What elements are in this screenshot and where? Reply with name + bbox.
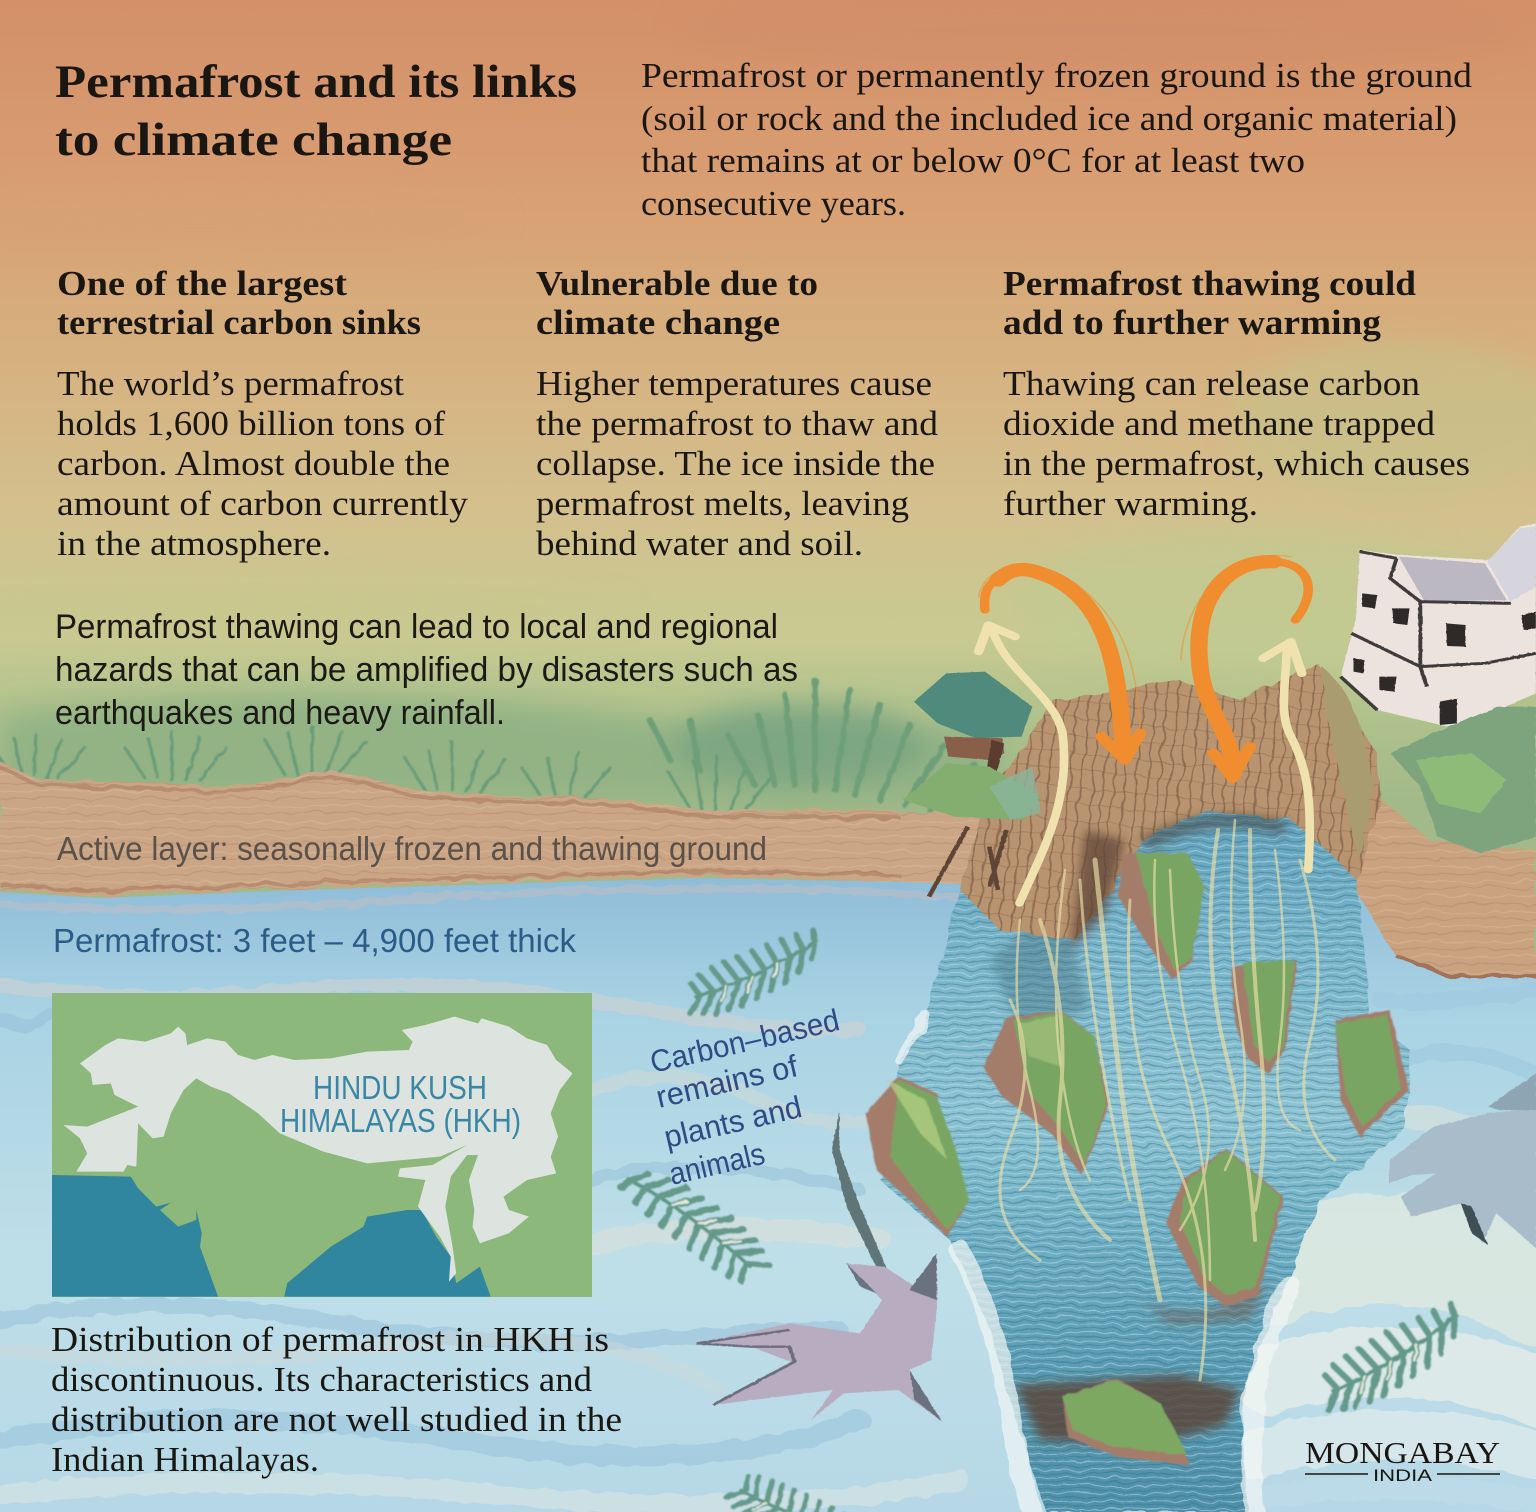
- text block: further warming body: further warming.: [1003, 484, 1258, 523]
- text block: distribution in HKH: Indian Himalayas.: [51, 1440, 319, 1479]
- heading: vulnerable: [536, 264, 818, 342]
- column: thaw slump blue body: [880, 790, 1410, 1512]
- text block: vulnerable body: permafrost melts, leaving: [536, 484, 909, 523]
- text block: vulnerable body: the permafrost to thaw and: [536, 404, 939, 443]
- map: oceans: [52, 1175, 491, 1297]
- map: HKH region: [64, 1017, 573, 1282]
- islands: green carbon remains in the thawed column: [866, 853, 1409, 1465]
- vegetation: bush below house: [1390, 707, 1536, 853]
- label: active layer: Active layer: seasonally frozen and thawing ground: [57, 830, 767, 867]
- text block: vulnerable body: [536, 364, 939, 563]
- heading: further warming: Permafrost thawing could: [1003, 264, 1417, 303]
- logo: Mongabay India: INDIA: [1373, 1466, 1433, 1485]
- map: region label: [280, 1069, 521, 1139]
- island: upper centre: [1119, 853, 1205, 980]
- text block: carbon sinks body: carbon. Almost double the: [57, 444, 450, 483]
- label: permafrost thickness: Permafrost: 3 feet – 4,900 feet thick: [53, 922, 576, 959]
- label: carbon-based remains: animals: [666, 1136, 768, 1192]
- text block: vulnerable body: Higher temperatures cause: [536, 364, 932, 403]
- fern: bottom: [723, 1449, 859, 1512]
- text block: definition of permafrost: that remains at or below 0°C for at least two: [641, 141, 1305, 180]
- fern: middle: [619, 1141, 773, 1306]
- text block: further warming body: in the permafrost, which causes: [1003, 444, 1470, 483]
- soil: brown hatched arch above the cavity: [960, 663, 1381, 940]
- text block: hazards note: earthquakes and heavy rainfall.: [55, 694, 505, 732]
- arrow: orange descending left: [979, 565, 1140, 760]
- soil: active layer band: [0, 762, 1000, 900]
- panel: further warming column: [1003, 264, 1470, 523]
- arrow: cream rising right: [1263, 642, 1310, 870]
- column: dark soil patches: [990, 900, 1270, 1445]
- text block: definition of permafrost: (soil or rock and the included ice and organic material): [641, 99, 1457, 138]
- title: Permafrost and its links: [55, 56, 577, 108]
- arrows: cream wisps rising through column: [1000, 820, 1335, 1380]
- map: Hindu Kush Himalayas: [52, 993, 592, 1297]
- islands: lower group: [866, 960, 1409, 1465]
- text block: carbon sinks body: holds 1,600 billion tons of: [57, 404, 445, 443]
- fossil: marine reptile: [696, 1110, 942, 1422]
- logo: Mongabay India: [1305, 1435, 1500, 1485]
- title: [55, 56, 577, 166]
- text block: hazards note: [55, 608, 798, 732]
- background: paper mottling: [0, 0, 1536, 670]
- text block: carbon sinks body: amount of carbon currently: [57, 484, 469, 523]
- title: to climate change: [55, 114, 452, 166]
- logo: Mongabay India: MONGABAY: [1305, 1435, 1500, 1470]
- house: cracked building on cliff: [1341, 523, 1536, 728]
- arrow: orange descending right: [1181, 555, 1308, 778]
- vegetation: tree on left of cliff: [903, 672, 1041, 897]
- text block: carbon sinks body: The world’s permafrost: [57, 364, 404, 403]
- permafrost: blue ice body: [0, 878, 1536, 1512]
- text block: hazards note: hazards that can be amplified by disasters such as: [55, 651, 798, 689]
- label: carbon-based remains: Carbon–based: [647, 1002, 843, 1080]
- heading: carbon sinks: [57, 264, 421, 342]
- label: carbon-based remains: remains of: [653, 1048, 801, 1115]
- soil: right bank: [1355, 790, 1536, 976]
- column: white chalk edges: [900, 1015, 1290, 1512]
- heading: carbon sinks: terrestrial carbon sinks: [57, 303, 421, 342]
- panel: carbon sinks column: [57, 264, 469, 563]
- text block: definition of permafrost: Permafrost or permanently frozen ground is the ground: [641, 56, 1473, 95]
- permafrost: wave bands: [0, 889, 1536, 1505]
- text block: vulnerable body: behind water and soil.: [536, 524, 863, 563]
- panel: vulnerable column: [536, 264, 939, 563]
- heading: vulnerable: Vulnerable due to: [536, 264, 818, 303]
- arrow: cream rising left: [979, 625, 1064, 903]
- text block: distribution in HKH: distribution are not well studied in the: [51, 1400, 622, 1439]
- text block: further warming body: dioxide and methane trapped: [1003, 404, 1436, 443]
- text block: definition of permafrost: consecutive years.: [641, 184, 906, 223]
- text block: carbon sinks body: in the atmosphere.: [57, 524, 331, 563]
- heading: carbon sinks: One of the largest: [57, 264, 347, 303]
- label: carbon-based remains: [647, 1002, 843, 1192]
- soil: dark shadow under arch: [1070, 814, 1290, 950]
- fossil: fish at right edge: [1389, 1073, 1536, 1248]
- background: distant green vegetation: [0, 580, 1536, 812]
- text block: further warming body: [1003, 364, 1470, 523]
- heading: vulnerable: climate change: [536, 303, 780, 342]
- text block: distribution in HKH: Distribution of permafrost in HKH is: [51, 1320, 609, 1359]
- text block: distribution in HKH: discontinuous. Its characteristics and: [51, 1360, 593, 1399]
- arrows: two warming cycles: [979, 555, 1310, 903]
- text block: carbon sinks body: [57, 364, 469, 563]
- fern: right: [1310, 1303, 1474, 1415]
- map: region label: HIMALAYAS (HKH): [280, 1102, 521, 1139]
- text block: distribution in HKH: [51, 1320, 622, 1479]
- fern: top: [679, 930, 827, 1018]
- text block: further warming body: Thawing can release carbon: [1003, 364, 1420, 403]
- text block: hazards note: Permafrost thawing can lead to local and regional: [55, 608, 778, 646]
- heading: further warming: add to further warming: [1003, 303, 1382, 342]
- heading: further warming: [1003, 264, 1417, 342]
- map: region label: HINDU KUSH: [313, 1069, 487, 1106]
- text block: vulnerable body: collapse. The ice inside the: [536, 444, 935, 483]
- text block: definition of permafrost: [641, 56, 1473, 223]
- label: carbon-based remains: plants and: [661, 1089, 805, 1155]
- ferns: fossil plants: [619, 930, 1474, 1512]
